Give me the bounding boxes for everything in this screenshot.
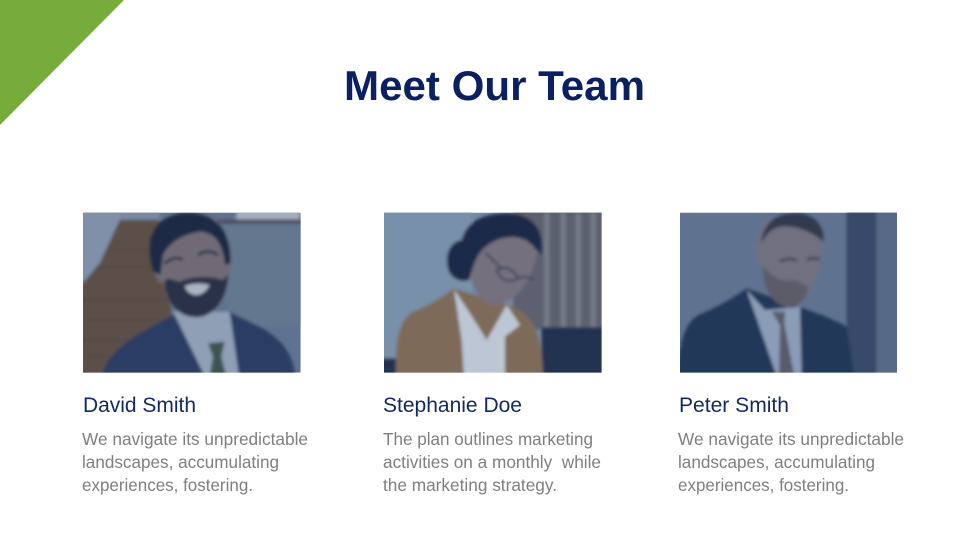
bio: Stephanie Doe: The plan outlines marketing	[383, 429, 593, 449]
bio: Peter Smith: We navigate its unpredictable	[678, 429, 904, 449]
bio: David Smith: We navigate its unpredictable	[82, 429, 308, 449]
bio: David Smith: experiences, fostering.	[82, 475, 253, 495]
bio: Peter Smith: experiences, fostering.	[678, 475, 849, 495]
panel: David Smith	[80, 209, 308, 495]
photo: Stephanie Doe	[380, 209, 603, 376]
bio: Stephanie Doe: activities on a monthly while	[383, 452, 601, 472]
photo: Peter Smith	[677, 209, 900, 376]
name: David Smith: David Smith	[83, 394, 196, 417]
bio: David Smith: landscapes, accumulating	[82, 452, 279, 472]
name: Peter Smith: Peter Smith	[679, 394, 789, 417]
panel: Stephanie Doe	[380, 209, 603, 495]
bio: Stephanie Doe: the marketing strategy.	[383, 475, 557, 495]
title: Meet Our Team	[344, 62, 645, 109]
green corner triangle	[0, 0, 124, 125]
panel: Peter Smith	[677, 209, 904, 495]
bio: Peter Smith	[678, 429, 904, 495]
bio: David Smith	[82, 429, 308, 495]
photo: David Smith	[80, 209, 303, 376]
bio: Peter Smith: landscapes, accumulating	[678, 452, 875, 472]
bio: Stephanie Doe	[383, 429, 601, 495]
name: Stephanie Doe: Stephanie Doe	[383, 394, 522, 417]
